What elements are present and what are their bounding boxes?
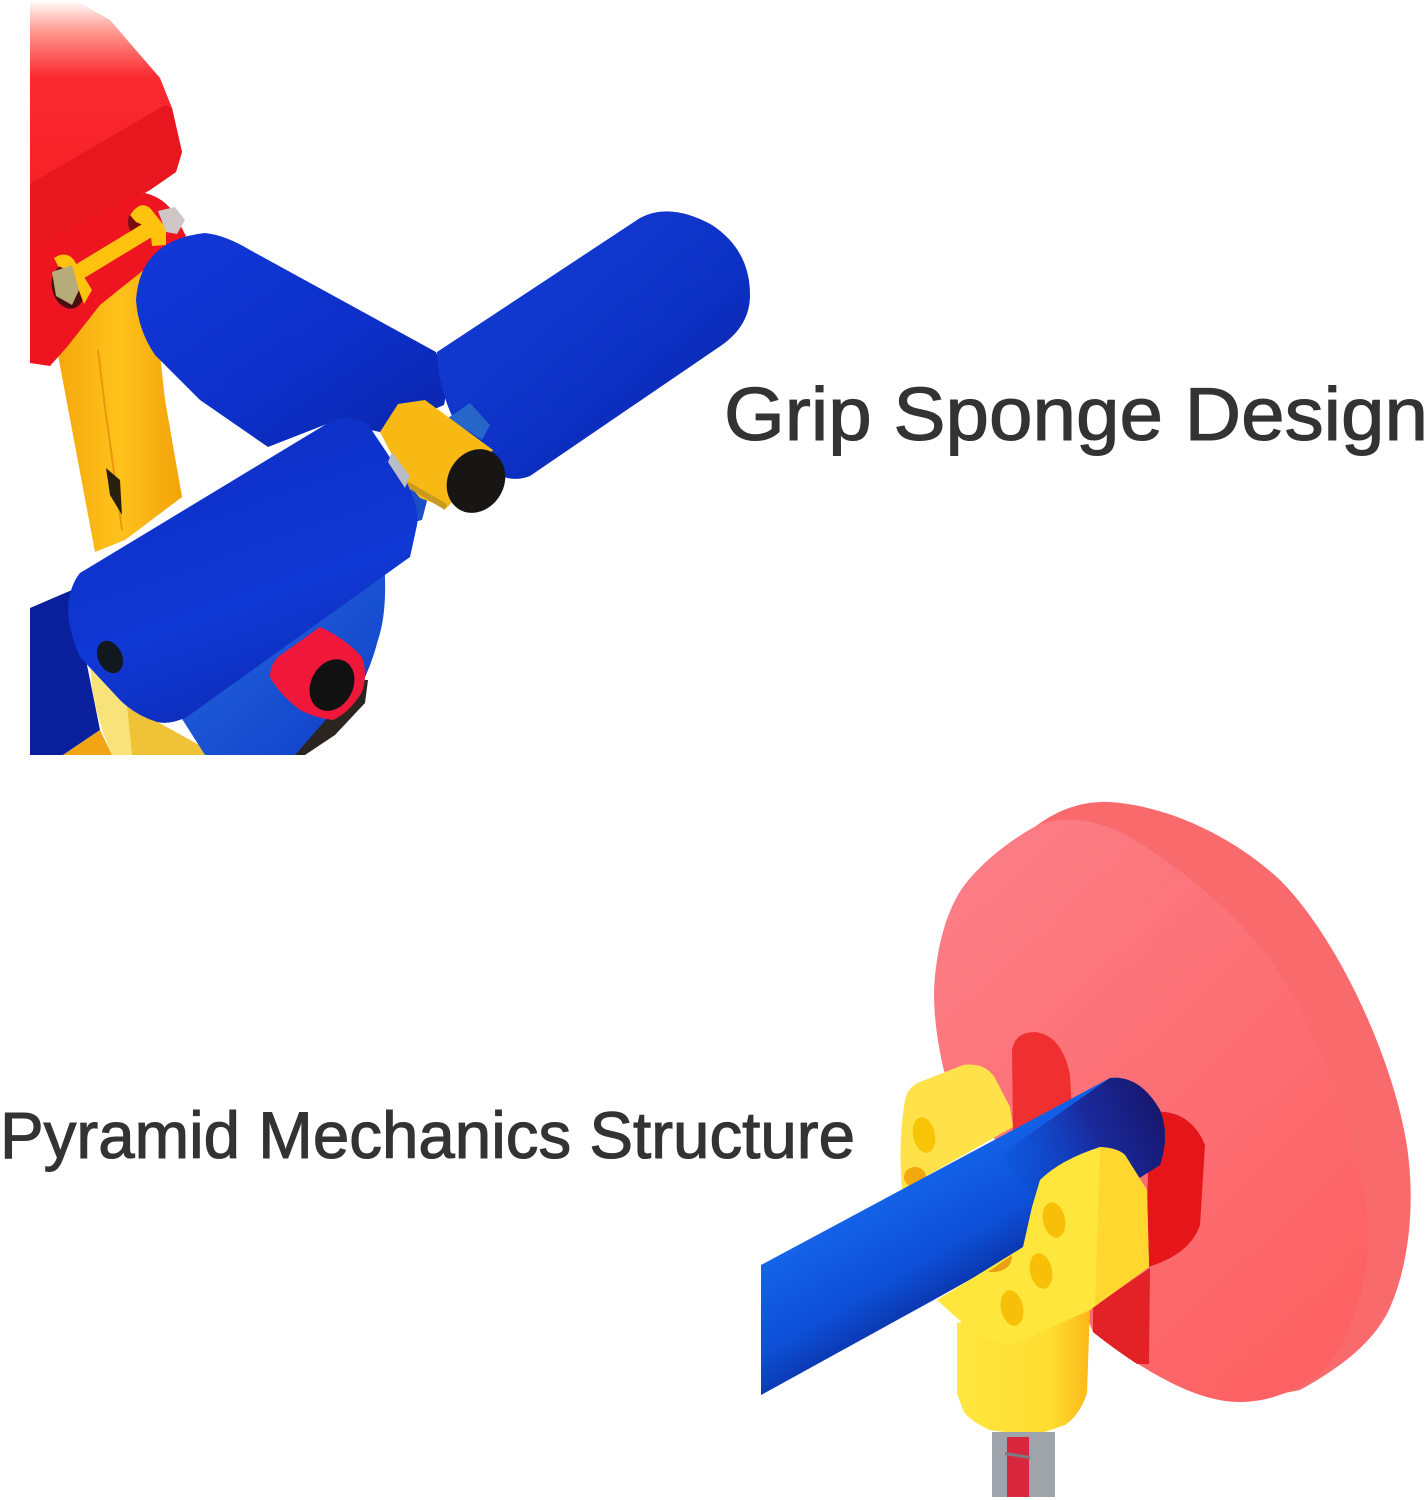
yellow front bracket [937, 1147, 1149, 1343]
yellow rear bracket [901, 1065, 1013, 1190]
roller end cap [96, 640, 124, 674]
steel pin [448, 403, 490, 440]
yellow stem [957, 1305, 1090, 1436]
dark foot under plate [295, 680, 368, 755]
grey pole with red insert [992, 1432, 1055, 1497]
blue sliver behind connector [410, 488, 428, 522]
disc cutout shadows [1012, 1032, 1205, 1364]
panel: pyramid mechanics photo [761, 802, 1411, 1497]
foam disc back layer [1036, 802, 1411, 1402]
blue bar and yellow hub [30, 590, 217, 755]
blue round plate [182, 575, 386, 755]
roller upper right [437, 211, 750, 479]
silver axle [388, 452, 410, 488]
panel: grip sponge photo [30, 0, 750, 755]
red hinge bracket [30, 193, 186, 366]
foam disc front face [934, 820, 1368, 1402]
seat cushion [30, 0, 182, 256]
roller upper left [136, 233, 446, 447]
blue tube [761, 1078, 1165, 1395]
red knob [270, 627, 365, 720]
yellow frame legs [58, 262, 182, 552]
yellow connector with end cap [380, 400, 506, 513]
heading: pyramid mechanics structure: Pyramid Mechanics Structure [0, 1098, 855, 1172]
heading: grip sponge design: Grip Sponge Design [724, 372, 1428, 456]
hinge bolts [52, 205, 185, 305]
roller lower [68, 418, 418, 723]
